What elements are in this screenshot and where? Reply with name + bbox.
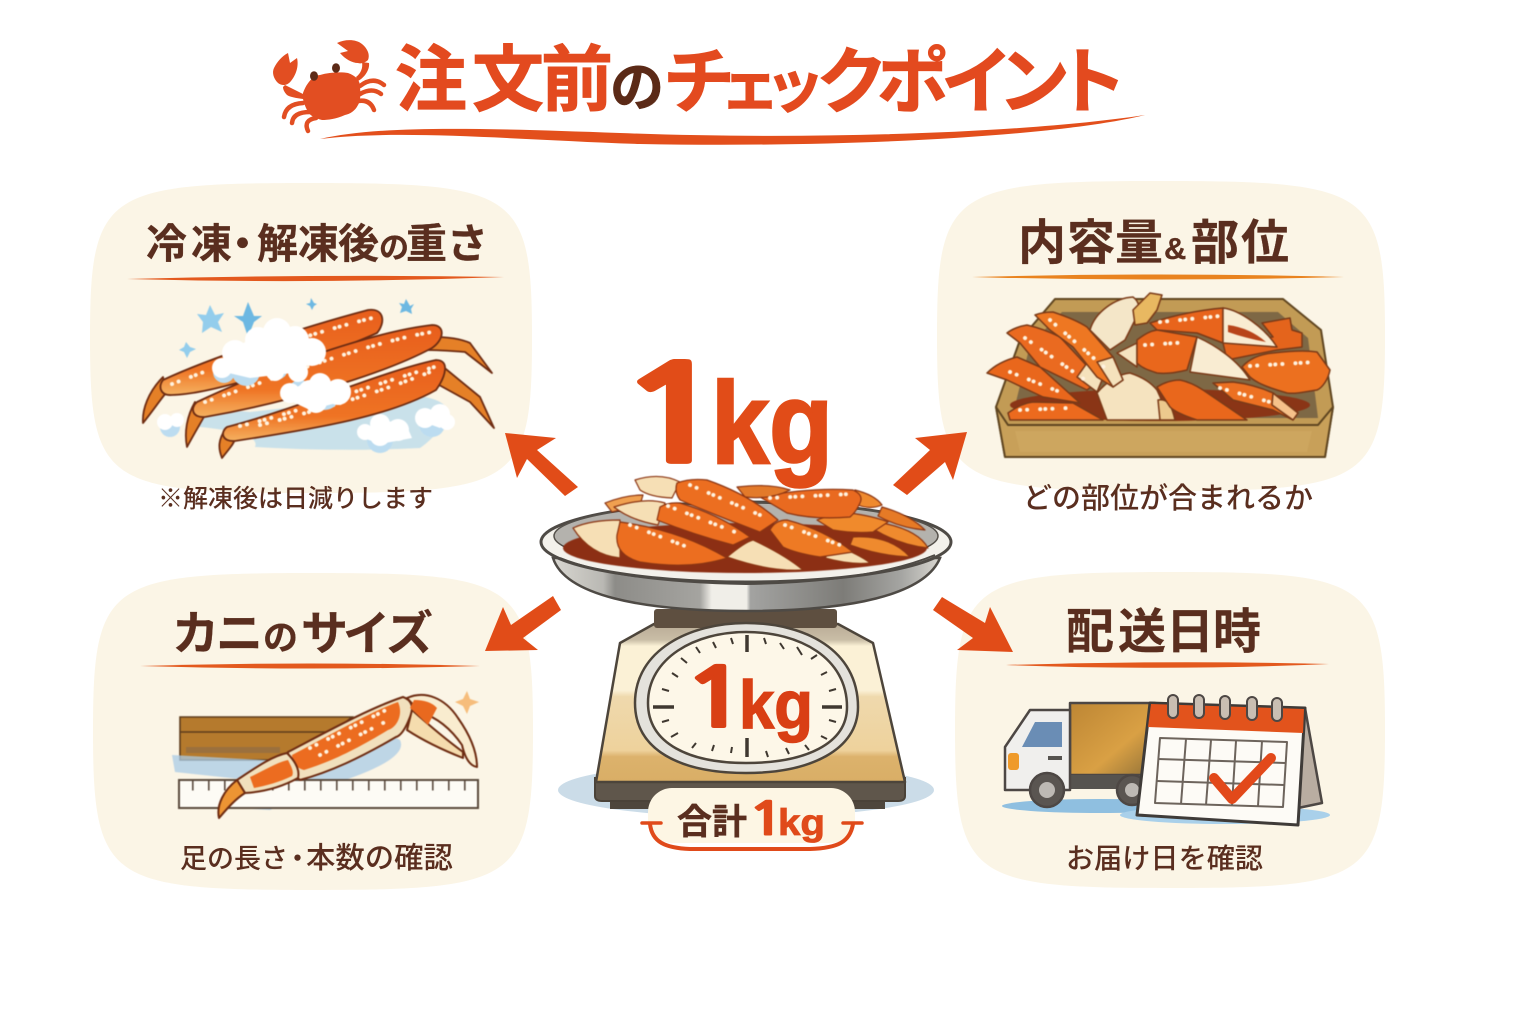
note: thawing loss: ※解凍後は日減りします <box>158 485 433 513</box>
title: ポ <box>877 43 949 123</box>
heading: frozen weight: 凍 <box>298 221 339 267</box>
heading: crab size: ズ <box>386 607 433 660</box>
heading rule <box>972 274 1344 280</box>
illustration: box of crab parts <box>987 293 1333 457</box>
title <box>395 41 1127 123</box>
heading: crab size: サ <box>301 607 348 660</box>
heading: frozen weight: ・ <box>222 221 263 267</box>
illustration: frosted crab legs <box>143 298 494 458</box>
dial reading: kg <box>739 667 813 743</box>
heading: delivery date: 日 <box>1166 606 1214 659</box>
illustration: truck and calendar <box>1002 695 1330 825</box>
heading: contents and parts: 容 <box>1067 217 1115 270</box>
heading rule <box>140 664 480 668</box>
heading: frozen weight: 重 <box>406 221 447 267</box>
heading: frozen weight: 冷 <box>146 221 187 267</box>
heading: frozen weight: 解 <box>257 221 298 267</box>
panel: delivery date <box>955 572 1385 888</box>
title: イ <box>941 43 1013 123</box>
heading: frozen weight: の <box>379 232 409 265</box>
heading: frozen weight: 凍 <box>191 221 232 267</box>
dial reading <box>681 658 813 743</box>
title: ト <box>1055 43 1127 123</box>
total label <box>642 788 862 849</box>
title: 文 <box>472 41 544 121</box>
dial reading: 1 <box>681 658 751 739</box>
icon: crab <box>273 40 384 131</box>
heading rule <box>127 276 504 281</box>
big 1kg label: kg <box>711 358 833 488</box>
snow clouds <box>157 318 455 453</box>
icon: calendar <box>1137 695 1322 825</box>
heading: contents and parts: 部 <box>1191 217 1239 270</box>
arrow: to crab size <box>485 596 561 651</box>
big 1kg label <box>614 350 833 488</box>
panel: crab size <box>93 573 533 890</box>
arrow: to delivery <box>933 597 1013 652</box>
total label: 合計 <box>677 803 747 842</box>
note: delivery date check: お届け日を確認 <box>1066 843 1263 874</box>
plate <box>541 502 951 611</box>
scale shadow <box>558 763 934 817</box>
heading: crab size: ニ <box>216 607 263 660</box>
crab on plate <box>563 476 928 573</box>
illustration: crab leg with ruler <box>172 691 479 818</box>
title: 注 <box>395 41 467 121</box>
title: ン <box>998 43 1070 123</box>
note: leg length and count: ・ <box>284 844 311 874</box>
title: チ <box>663 43 735 123</box>
title: ェ <box>720 53 780 120</box>
scale with crab <box>541 476 951 849</box>
heading: frozen weight: さ <box>447 221 488 267</box>
dial <box>635 623 858 773</box>
arrow: to contents <box>893 432 967 495</box>
heading: delivery date: 配 <box>1066 606 1114 659</box>
heading: contents and parts: 量 <box>1115 217 1163 270</box>
heading: delivery date: 送 <box>1118 606 1166 659</box>
note: parts included: どの部位が合まれるか <box>1023 482 1313 515</box>
panel: frozen and thawed weight <box>90 183 532 513</box>
heading: contents and parts: 内 <box>1018 217 1066 270</box>
note: leg length and count: 本数の確認 <box>306 842 453 875</box>
heading: contents and parts: 位 <box>1241 217 1289 270</box>
heading: crab size: イ <box>343 607 390 660</box>
icon: truck <box>1005 703 1155 807</box>
title: ク <box>816 43 888 123</box>
heading: crab size: の <box>263 619 298 658</box>
heading: crab size: カ <box>172 607 219 660</box>
total label: 1 <box>747 797 786 842</box>
title: ッ <box>765 53 825 120</box>
heading: contents and parts: & <box>1164 231 1186 266</box>
panel: contents and parts <box>937 181 1385 515</box>
arrow: to frozen weight <box>505 433 578 496</box>
title: 前 <box>541 41 613 121</box>
note: leg length and count: 足の長さ <box>180 844 288 874</box>
heading: frozen weight: 後 <box>338 221 379 267</box>
big 1kg label: 1 <box>614 350 735 482</box>
title underline swoosh <box>320 115 1145 145</box>
scale body <box>595 609 905 809</box>
title: の <box>610 58 664 118</box>
heading rule <box>1006 662 1329 668</box>
total label: kg <box>778 802 825 843</box>
heading: delivery date: 時 <box>1213 606 1261 659</box>
